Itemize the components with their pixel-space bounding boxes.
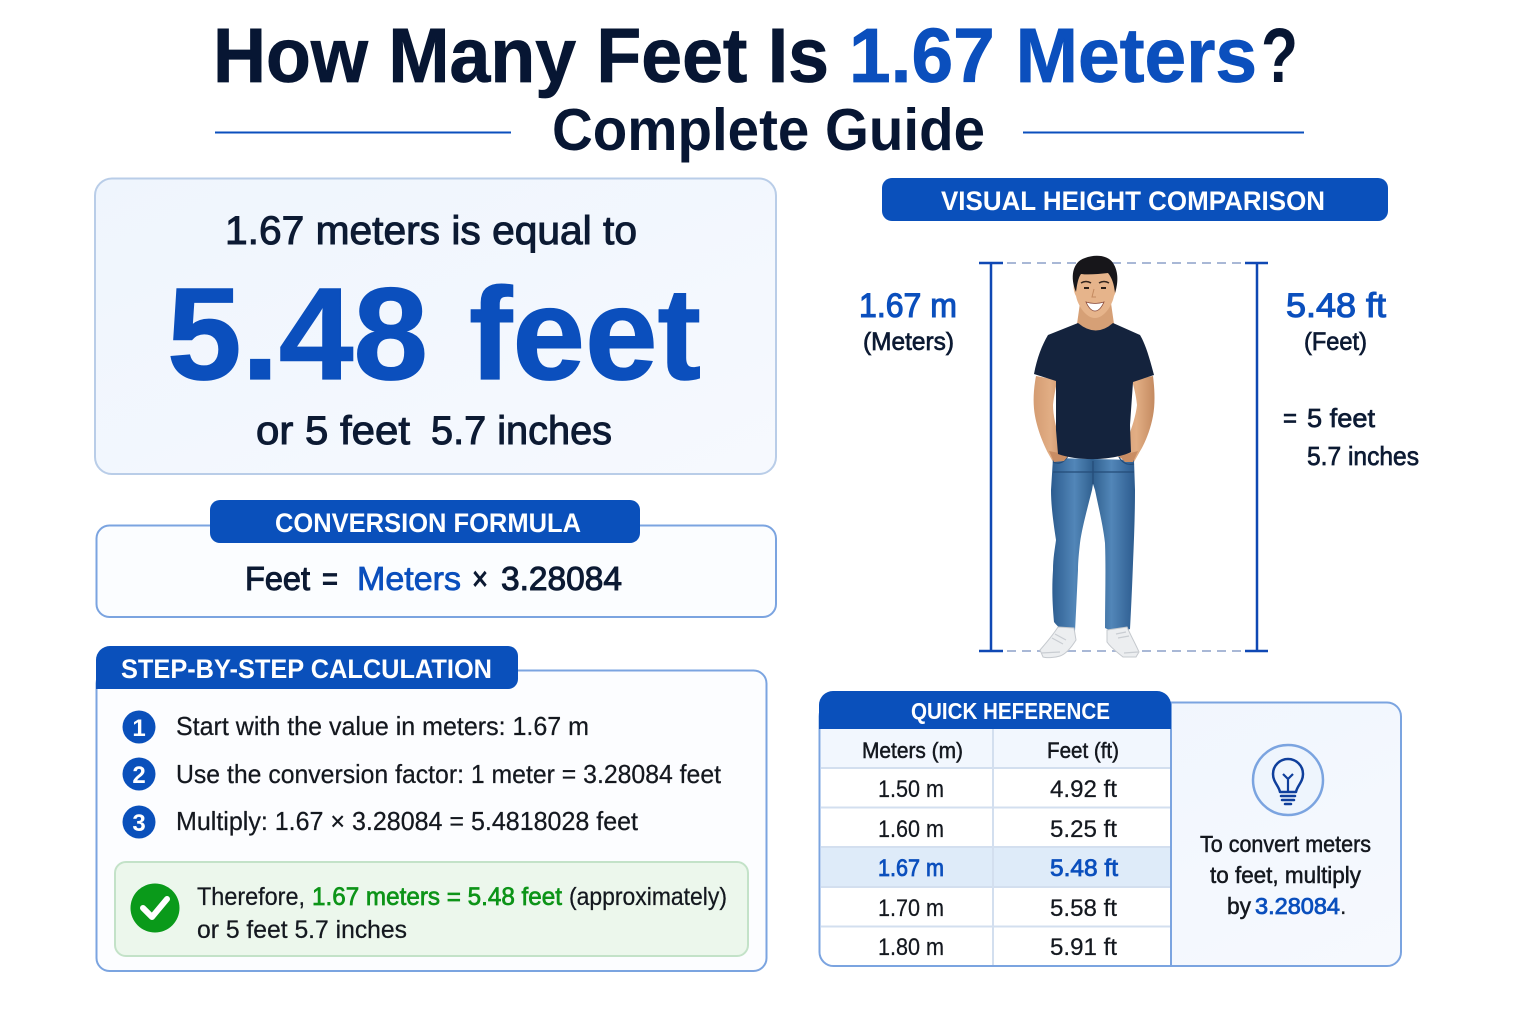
arms bbox=[1034, 376, 1068, 462]
text: or 5 feet 5.7 inches: or 5 feet bbox=[256, 409, 410, 453]
formula: × bbox=[472, 560, 488, 597]
heading: step-by-step calculation: STEP-BY-STEP CALCULATION bbox=[121, 654, 492, 684]
tip text: . bbox=[1340, 893, 1346, 919]
heading: conversion formula: CONVERSION FORMULA bbox=[275, 508, 581, 538]
jeans bbox=[1051, 458, 1135, 632]
subtitle: Complete Guide: Complete Guide bbox=[552, 97, 985, 163]
tip text bbox=[1200, 831, 1371, 919]
formula: = bbox=[322, 560, 338, 597]
table heading bbox=[819, 691, 1171, 729]
formula bbox=[245, 560, 622, 597]
table rows: 1.50 m bbox=[878, 776, 944, 803]
text: or 5 feet 5.7 inches bbox=[256, 409, 612, 453]
hair bbox=[1073, 256, 1117, 293]
big answer: 5.48 feet bbox=[167, 260, 701, 407]
callout: result: (approximately) bbox=[569, 883, 727, 911]
text: or 5 feet 5.7 inches: 5.7 inches bbox=[431, 409, 612, 453]
table rows: 1.60 m bbox=[878, 816, 944, 843]
step 1: 1 bbox=[132, 715, 146, 742]
callout: result: or 5 feet 5.7 inches bbox=[197, 916, 407, 944]
table rows: 5.48 ft bbox=[1050, 855, 1118, 882]
t-shirt bbox=[1034, 323, 1154, 459]
tip text: 3.28084 bbox=[1255, 893, 1340, 919]
big answer: 5.48 feet: feet bbox=[469, 260, 701, 407]
label: height in feet bbox=[1283, 287, 1419, 471]
heading: conversion formula bbox=[210, 500, 640, 543]
tip text: To convert meters bbox=[1200, 831, 1371, 857]
formula: 3.28084 bbox=[501, 560, 622, 597]
table rows: 5.25 ft bbox=[1050, 816, 1117, 843]
title: ? bbox=[1261, 13, 1298, 99]
label: height in meters: (Meters) bbox=[863, 328, 954, 356]
table rows: 1.67 m bbox=[878, 855, 944, 882]
table rows: 1.80 m bbox=[878, 934, 944, 961]
step 3: 3 bbox=[132, 810, 146, 837]
title bbox=[213, 13, 1298, 99]
title: 1.67 Meters bbox=[849, 13, 1257, 99]
label: height in feet: 5.7 inches bbox=[1307, 441, 1419, 471]
height brackets bbox=[979, 263, 1268, 651]
tip text: to feet, multiply bbox=[1210, 862, 1361, 888]
column headers: Meters (m) bbox=[862, 738, 963, 763]
label: height in meters: 1.67 m bbox=[859, 287, 957, 325]
face bbox=[1081, 282, 1109, 283]
step 3: Multiply: 1.67 × 3.28084 = 5.4818028 feet bbox=[176, 806, 639, 836]
step 2: Use the conversion factor: 1 meter = 3.28084 feet bbox=[176, 759, 722, 789]
table rows bbox=[878, 776, 1118, 961]
callout: result: Therefore, bbox=[197, 883, 305, 911]
panel: conversion formula bbox=[96, 500, 776, 617]
illustration: standing man bbox=[1034, 256, 1154, 658]
label: height in feet: 5.48 ft bbox=[1286, 287, 1387, 325]
label: height in feet: 5 feet bbox=[1307, 403, 1376, 433]
heading: visual height comparison: VISUAL HEIGHT COMPARISON bbox=[941, 186, 1325, 216]
big answer: 5.48 feet: 5.48 bbox=[167, 260, 428, 407]
formula: Meters bbox=[357, 560, 461, 597]
step 1: Start with the value in meters: 1.67 m bbox=[176, 711, 589, 741]
neck bbox=[1077, 303, 1114, 333]
column headers: Feet (ft) bbox=[1047, 738, 1119, 763]
label: height in feet: (Feet) bbox=[1304, 328, 1367, 356]
panel: step-by-step calculation bbox=[96, 646, 766, 971]
title: How Many Feet Is bbox=[213, 13, 829, 99]
icon: check mark bbox=[130, 884, 180, 932]
heading: step-by-step calculation bbox=[96, 646, 518, 689]
panel: main answer bbox=[95, 178, 776, 474]
callout: result: 1.67 meters = 5.48 feet bbox=[312, 883, 562, 911]
shoes bbox=[1040, 627, 1139, 658]
callout: result bbox=[115, 862, 748, 956]
heading: visual height comparison bbox=[882, 178, 1388, 221]
label: height in feet: = bbox=[1283, 403, 1297, 433]
panel: quick reference bbox=[819, 691, 1401, 966]
table rows: 1.70 m bbox=[878, 895, 944, 922]
formula: Feet bbox=[245, 560, 310, 597]
step 2: 2 bbox=[132, 762, 146, 789]
text: 1.67 meters is equal to: 1.67 meters is equal to bbox=[225, 209, 637, 253]
tip text: by bbox=[1227, 893, 1251, 919]
table heading: QUICK HEFERENCE bbox=[911, 698, 1110, 724]
table rows: 4.92 ft bbox=[1050, 776, 1117, 803]
table rows: 5.58 ft bbox=[1050, 895, 1117, 922]
table: meters to feet bbox=[819, 691, 1171, 966]
icon: light bulb bbox=[1253, 745, 1323, 815]
label: height in meters bbox=[859, 287, 957, 356]
column headers bbox=[862, 738, 1119, 763]
head bbox=[1074, 263, 1116, 318]
hands in pockets bbox=[1049, 451, 1138, 462]
table rows: 5.91 ft bbox=[1050, 934, 1117, 961]
